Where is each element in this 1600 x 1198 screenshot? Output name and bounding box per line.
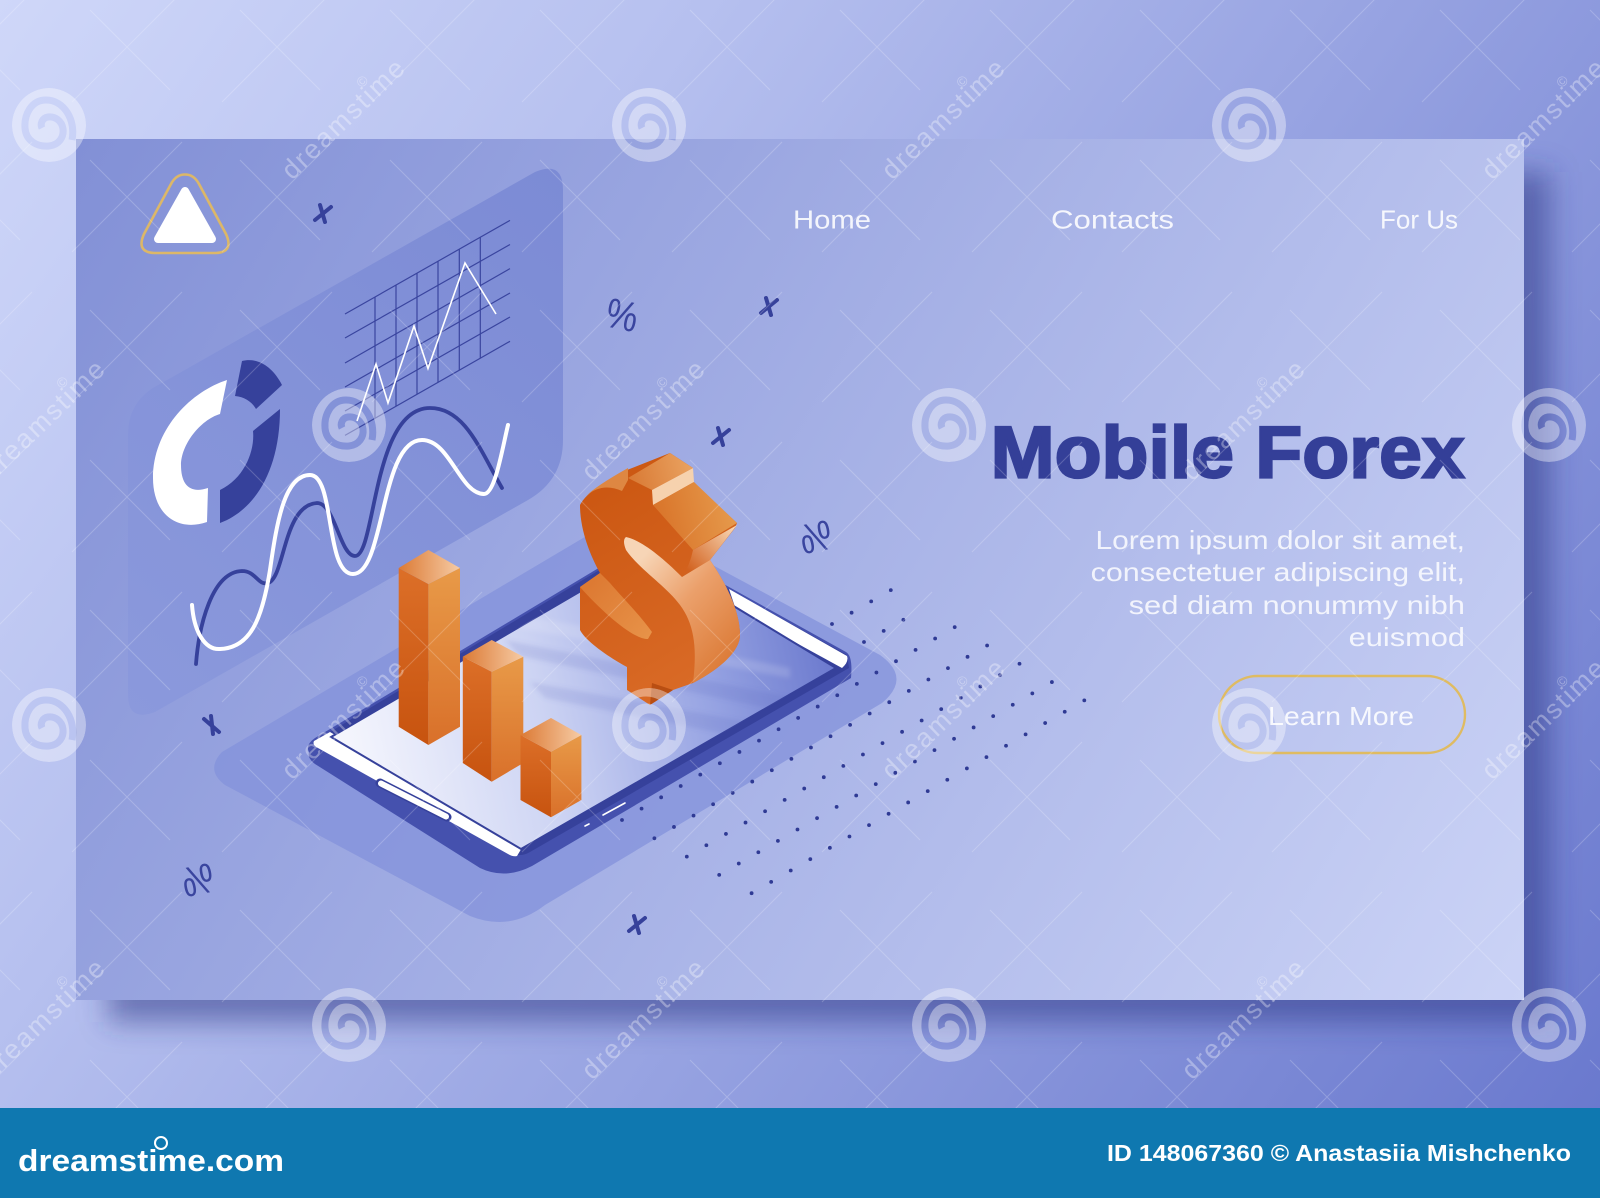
icon: triangle logo (142, 174, 228, 253)
title: Mobile Forex (991, 413, 1465, 494)
watermark text: dreamstime (1175, 353, 1312, 486)
icon: 3D dollar sign (580, 453, 740, 705)
watermark text: dreamstime (575, 952, 712, 1085)
watermark text: © (353, 71, 373, 91)
watermark text: © (53, 971, 73, 991)
watermark text: © (653, 372, 673, 392)
bar: medium (463, 640, 523, 782)
watermark text: dreamstime (875, 52, 1012, 185)
watermark text: © (53, 372, 73, 392)
nav: Home: Home (793, 204, 871, 234)
footer logo: dreamstime.com (18, 1143, 284, 1178)
icon: percent signs: % (796, 512, 836, 564)
body text: consectetuer adipiscing elit, (1091, 557, 1465, 587)
watermark text: © (353, 671, 373, 691)
watermark text: © (953, 71, 973, 91)
button: Learn More: Learn More (1268, 701, 1414, 731)
watermark text: dreamstime (575, 353, 712, 486)
body text: euismod (1349, 622, 1465, 652)
icon: percent signs (178, 290, 836, 907)
phone side buttons (585, 803, 625, 826)
chart: white zigzag line (357, 263, 496, 421)
body text: Lorem ipsum dolor sit amet, (1096, 525, 1465, 555)
chart: wave lines (192, 408, 508, 664)
card shadow (108, 172, 1550, 1022)
watermark text: dreamstime (275, 652, 412, 785)
footer credit: ID 148067360 © Anastasiia Mishchenko (1107, 1140, 1571, 1166)
body text: sed diam nonummy nibh (1129, 590, 1465, 620)
watermark text: © (1253, 971, 1273, 991)
chart: donut (153, 360, 282, 525)
button: Learn More (1219, 676, 1465, 753)
body text (1091, 525, 1465, 652)
watermark text: dreamstime (875, 652, 1012, 785)
phone shadow (214, 521, 897, 922)
panel: landing page card (76, 139, 1524, 1000)
watermark text: © (653, 971, 673, 991)
bar: tall (399, 550, 460, 745)
icon: plus marks (204, 205, 777, 933)
watermark text: dreamstime (275, 52, 412, 185)
watermark spirals (12, 88, 1586, 1062)
nav: For Us: For Us (1380, 204, 1458, 234)
watermark text: © (1553, 671, 1573, 691)
watermark text: © (1553, 71, 1573, 91)
panel: floating chart screen (128, 169, 563, 715)
nav: Contacts: Contacts (1051, 204, 1174, 234)
screen light bands (508, 616, 790, 732)
phone home button (380, 783, 447, 817)
phone (308, 544, 851, 874)
watermark text: © (1253, 372, 1273, 392)
chart: line grid (345, 220, 510, 435)
icon: percent signs: % (602, 290, 642, 342)
watermark text: © (953, 671, 973, 691)
footer bar (0, 1108, 1600, 1198)
dot field (622, 590, 1085, 893)
bar: short (520, 718, 581, 817)
watermark text: dreamstime (1175, 952, 1312, 1085)
icon: percent signs: % (178, 855, 218, 907)
